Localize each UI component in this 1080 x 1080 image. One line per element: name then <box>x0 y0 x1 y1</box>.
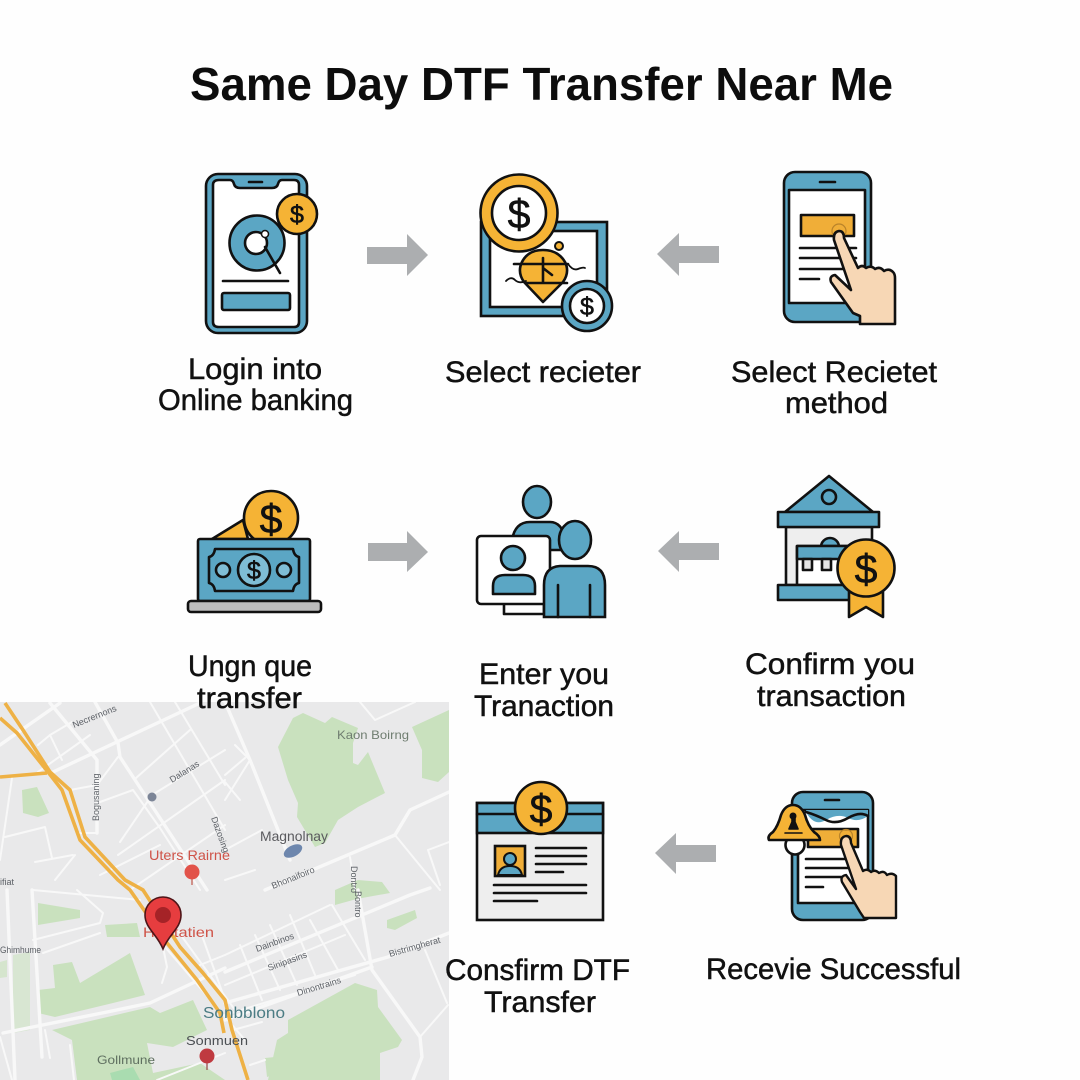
map parks <box>0 710 449 1080</box>
map labels <box>0 703 442 1067</box>
label: confirm DTF transfer: Transfer <box>484 986 596 1019</box>
label: select method: method <box>785 387 888 420</box>
map labels: Bhonaifoiro <box>270 865 316 891</box>
label: transfer: transfer <box>197 682 302 715</box>
icon: banknote laptop with coin <box>188 491 321 612</box>
label: select receiver: Select recieter <box>445 356 641 389</box>
map marker: blue blob <box>282 841 304 861</box>
map pin: main location <box>145 897 181 949</box>
map labels: Ghimhume <box>0 945 41 955</box>
icon: document window with coin: $ <box>530 786 553 832</box>
map labels: Bogusaning <box>91 773 101 821</box>
map pin: bottom red <box>200 1048 214 1070</box>
label: select method: Select Recietet <box>731 356 938 389</box>
step 8: receive successful <box>706 792 961 986</box>
icon: phone with bell and hand <box>768 792 896 920</box>
icon: banknote laptop with coin: $ <box>260 496 283 542</box>
label: login: Login into <box>188 353 322 386</box>
label: confirm transaction: Confirm you <box>745 648 915 681</box>
map labels: Dontro <box>349 866 359 893</box>
arrow: left 3 <box>655 833 716 874</box>
map labels: Hi Statien <box>143 924 214 940</box>
step 3: select method <box>731 172 938 420</box>
title: Same Day DTF Transfer Near Me <box>190 58 893 110</box>
map labels: Magnolnay <box>260 828 328 844</box>
icon: phone with tapping hand <box>784 172 895 324</box>
panel: map <box>0 702 449 1080</box>
map labels: Sonmuen <box>186 1033 248 1048</box>
map labels: Necrernons <box>71 703 118 730</box>
map labels: Bontro <box>353 891 363 918</box>
arrow: left 1 <box>657 233 719 276</box>
step 5: enter transaction <box>474 486 614 723</box>
map labels: Dalanas <box>168 758 201 785</box>
icon: bank with coin badge: $ <box>855 546 878 592</box>
label: login: Online banking <box>158 384 353 417</box>
map labels: Sonbblono <box>203 1005 285 1022</box>
map labels: Sinipasins <box>266 949 309 973</box>
map roads <box>0 702 449 1080</box>
icon: banknote laptop with coin: $ <box>247 557 261 585</box>
label: receive successful: Recevie Successful <box>706 953 961 986</box>
label: enter transaction: Tranaction <box>474 690 614 723</box>
arrow: left 2 <box>658 531 719 572</box>
map labels: Gollmune <box>97 1053 155 1067</box>
label: confirm DTF transfer: Consfirm DTF <box>445 954 630 987</box>
icon: phone with coin <box>206 174 317 333</box>
step 6: confirm transaction <box>745 476 915 713</box>
icon: document window with coin <box>477 782 603 920</box>
map pin: small red <box>184 864 200 885</box>
map highways <box>0 703 248 1080</box>
icon: framed coins: $ <box>580 293 594 321</box>
icon: framed coins <box>480 174 612 331</box>
icon: bank with coin badge <box>778 476 894 617</box>
label: transfer: Ungn que <box>188 650 312 683</box>
map marker: grey dot <box>148 792 156 802</box>
map labels: Dainbinos <box>254 931 296 954</box>
arrow: right 2 <box>368 531 428 572</box>
icon: people and monitor <box>477 486 605 617</box>
label: enter transaction: Enter you <box>479 658 609 691</box>
map labels: Dinontrains <box>296 975 343 998</box>
step 1: login <box>158 174 353 417</box>
step 4: transfer <box>188 491 321 715</box>
label: confirm transaction: transaction <box>757 680 906 713</box>
step 7: confirm DTF transfer <box>445 782 630 1019</box>
step 2: select receiver <box>445 174 641 389</box>
icon: framed coins: $ <box>508 191 531 237</box>
arrow: right 1 <box>367 234 428 276</box>
map labels: Bistrimgherat <box>388 935 442 959</box>
map labels: ifiat <box>0 877 15 887</box>
map labels: Kaon Boirng <box>337 728 409 742</box>
map labels: Uters Rairne <box>149 847 230 863</box>
icon: phone with coin: $ <box>290 201 304 229</box>
map labels: Dazosing <box>209 815 231 854</box>
